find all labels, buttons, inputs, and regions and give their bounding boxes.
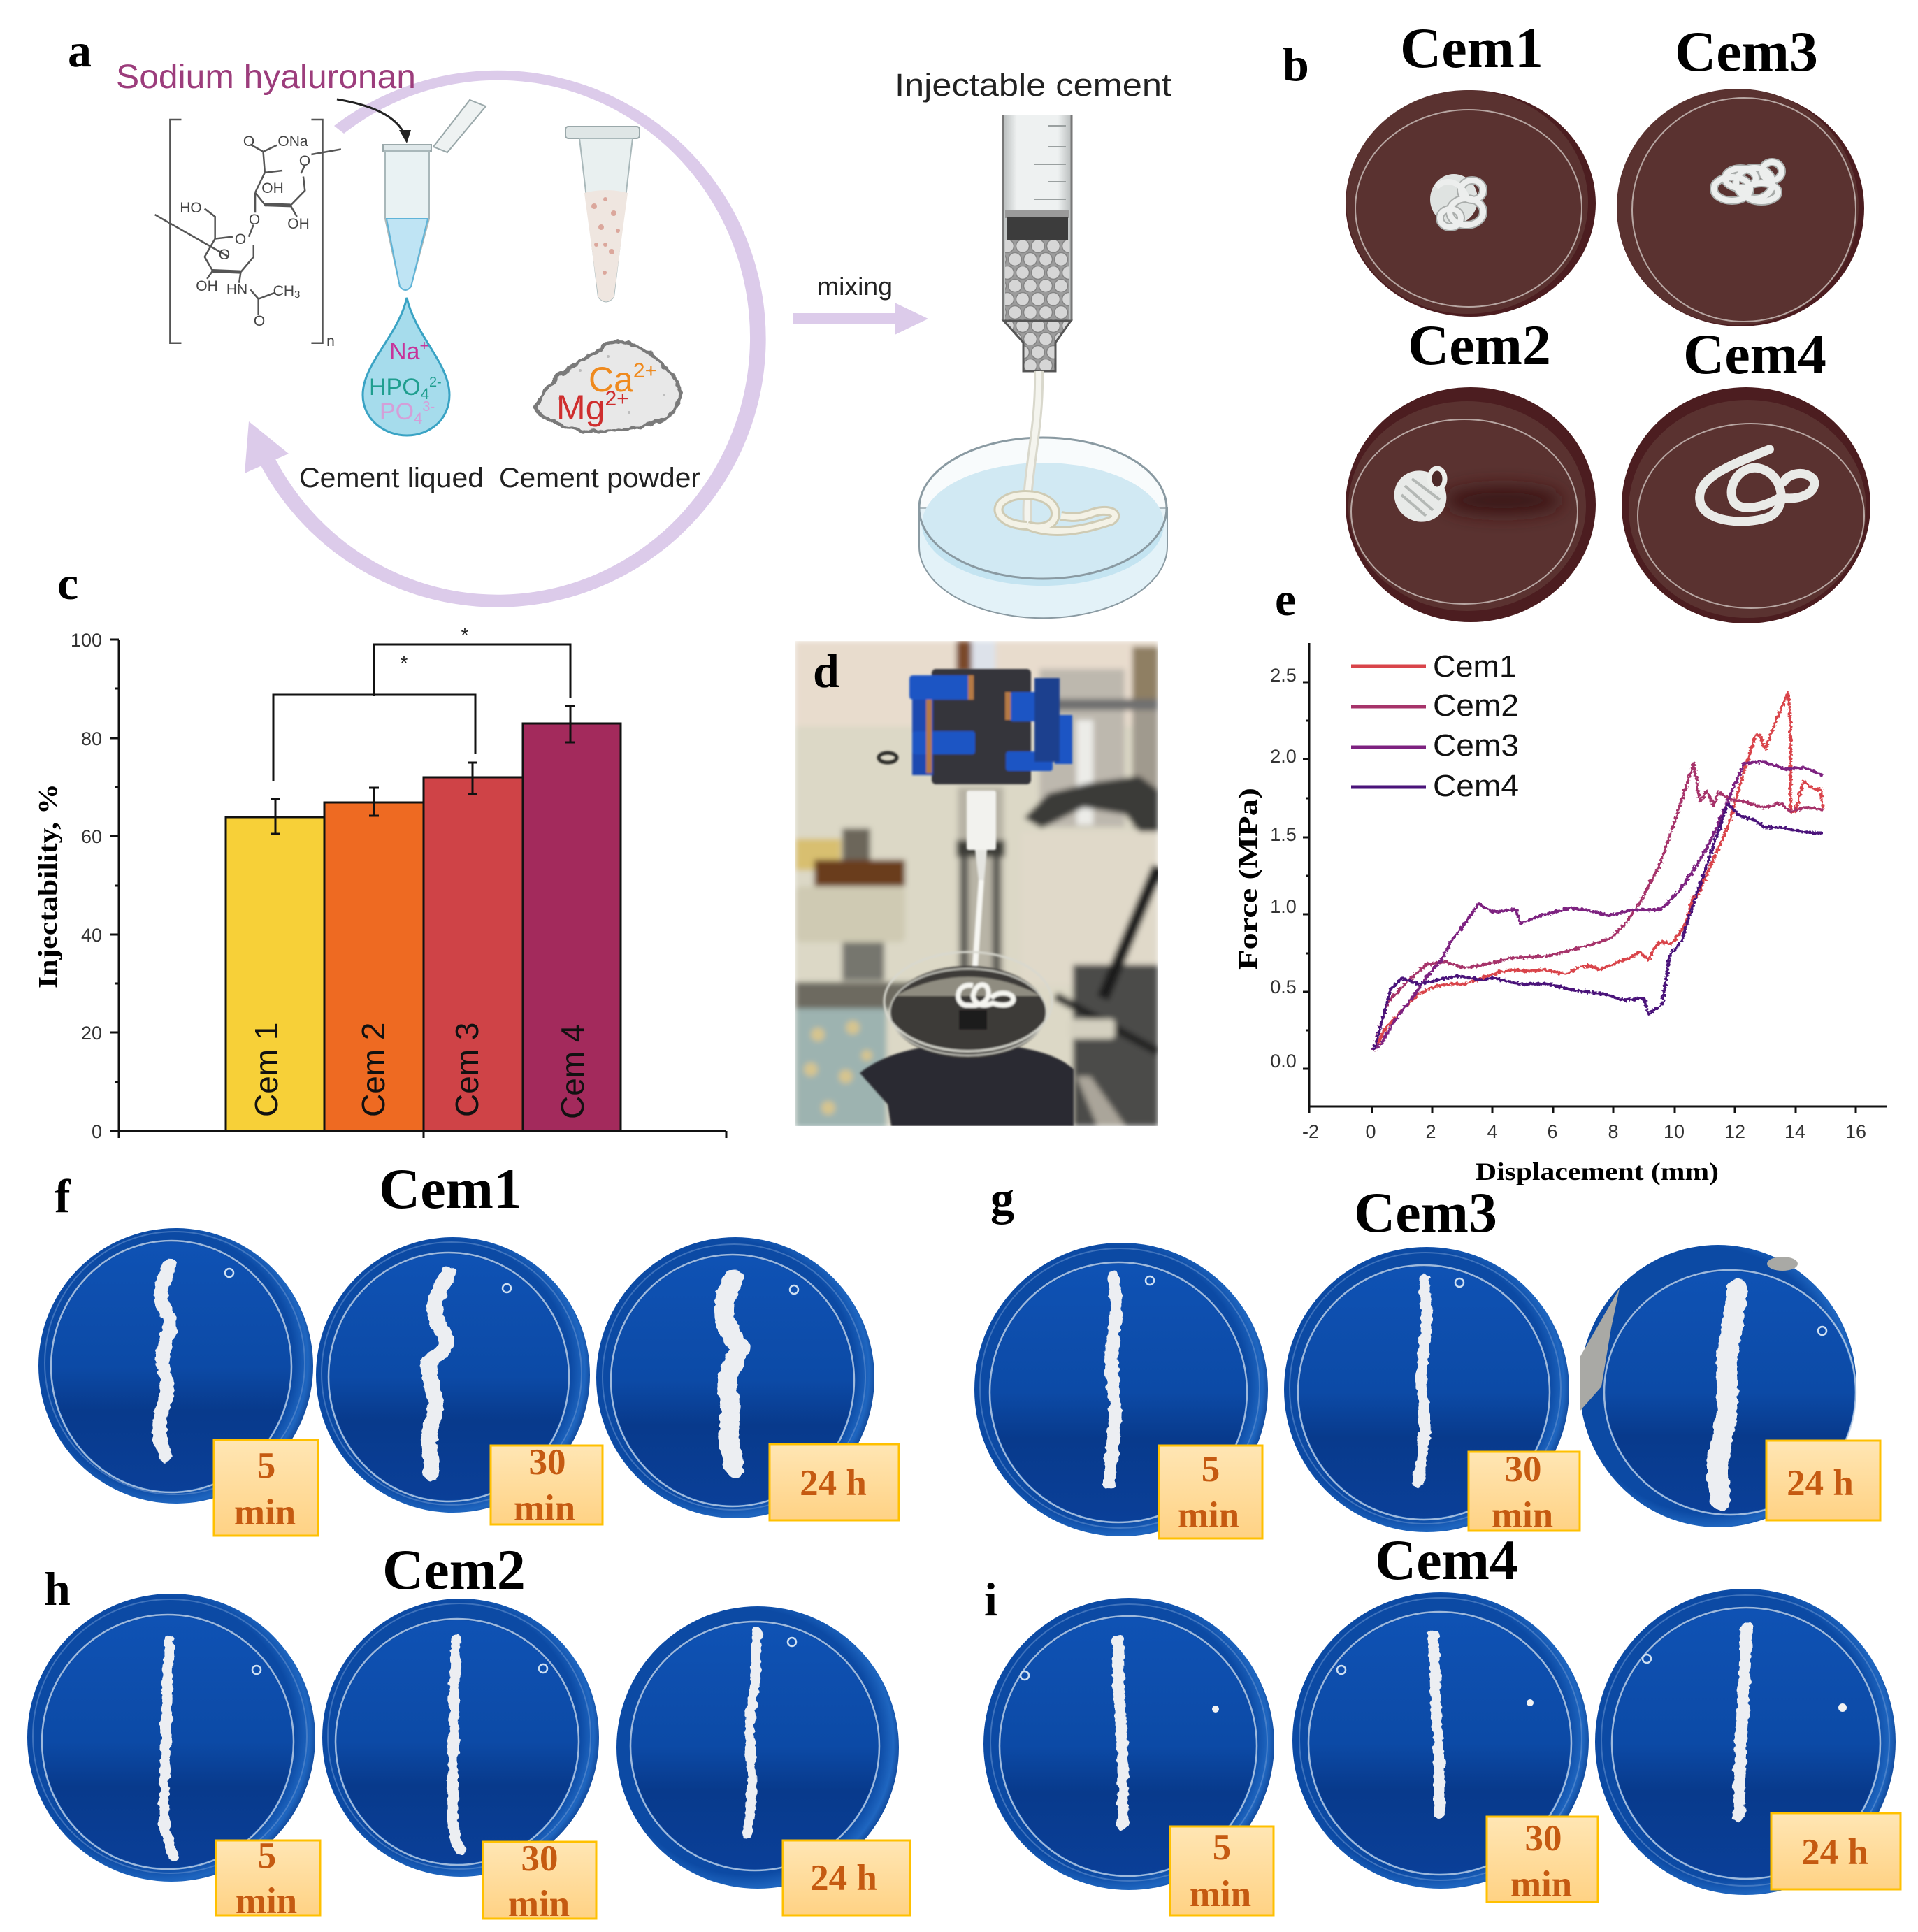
y tick labels: 0.0 (1270, 1051, 1297, 1072)
photo background and equipment (795, 641, 1158, 1127)
icon: petri dish with extruded cement (919, 371, 1167, 618)
photo: Cem2 dish (1346, 387, 1596, 622)
icon: powder pile with ions (536, 341, 681, 432)
chemical structure of hyaluronan: HN (226, 282, 247, 298)
icon: powder pile with ions: 2+ (633, 359, 657, 382)
error bars (271, 706, 575, 834)
chemical structure of hyaluronan: CH (273, 283, 294, 299)
axes and ticks (110, 640, 726, 1138)
heading Cem2: Cem2 (1408, 313, 1551, 377)
legend (1351, 649, 1519, 803)
photo: Cem4 dish (1622, 387, 1870, 623)
panel g: Cem3 washout photos (974, 1172, 1880, 1538)
chemical structure of hyaluronan (155, 120, 341, 349)
clamp (879, 669, 1072, 784)
significance brackets: * (401, 652, 408, 674)
x tick labels: 2 (1425, 1121, 1436, 1142)
x tick labels: 6 (1547, 1121, 1558, 1142)
icon: liquid drop with ions: PO (380, 398, 414, 425)
time label 30 min: 30 (521, 1838, 558, 1879)
heading Cem1: Cem1 (1400, 16, 1543, 80)
x axis title: Displacement (mm) (1476, 1158, 1719, 1185)
x tick labels: 16 (1845, 1121, 1866, 1142)
chemical structure of hyaluronan: O (219, 247, 230, 263)
y tick labels: 80 (81, 728, 102, 749)
chemical structure of hyaluronan: OH (196, 278, 218, 294)
time label 24 h (1771, 1813, 1901, 1889)
time label 24 h: 24 h (800, 1463, 867, 1504)
dish 30 min (322, 1599, 599, 1877)
icon: syringe (1003, 115, 1072, 371)
panel label f: f (55, 1169, 71, 1223)
heading: sodium hyaluronan: Sodium hyaluronan (116, 59, 416, 96)
dish 24 h (1595, 1589, 1896, 1895)
icon: liquid drop with ions (363, 298, 449, 435)
icon: powder pile with ions: 2+ (605, 387, 629, 410)
chemical structure of hyaluronan: 3 (294, 289, 300, 301)
syringe and extruded filament (967, 791, 996, 986)
icon: liquid drop with ions: 4 (414, 410, 422, 427)
panel e: force displacement chart (1234, 643, 1887, 1185)
heading Cem3: Cem3 (1675, 20, 1818, 83)
heading Cem4: Cem4 (1375, 1528, 1518, 1592)
icon: liquid tube (383, 100, 486, 290)
y tick labels: 20 (81, 1023, 102, 1044)
time label 30 min: 30 (528, 1442, 566, 1483)
time label 24 h: 24 h (810, 1858, 877, 1898)
panel label i: i (984, 1573, 997, 1626)
panel label g: g (990, 1172, 1014, 1225)
y axis title: Injectability, % (34, 784, 63, 988)
heading Cem2: Cem2 (382, 1538, 526, 1601)
heading Cem4: Cem4 (1683, 322, 1826, 386)
x tick labels: 8 (1608, 1121, 1619, 1142)
x tick labels (1302, 1121, 1866, 1142)
panel h: Cem2 washout photos (27, 1538, 910, 1924)
time label 5 min (216, 1836, 320, 1922)
icon: powder pile with ions: Ca (589, 360, 633, 399)
panel a: cement preparation schematic (68, 24, 1172, 618)
legend: Cem4 (1433, 769, 1519, 803)
time label 5 min: 5 (1202, 1449, 1220, 1490)
time label 24 h (783, 1840, 910, 1915)
y tick labels: 0.5 (1270, 976, 1297, 997)
bar labels: Cem 4 (554, 1025, 591, 1119)
icon: liquid drop with ions: 2- (429, 375, 442, 390)
chemical structure of hyaluronan: O (243, 134, 254, 150)
time label 5 min: min (236, 1881, 297, 1922)
icon: liquid drop with ions: 3- (422, 399, 435, 414)
y tick labels: 100 (71, 630, 102, 651)
bar labels: Cem 2 (355, 1023, 391, 1117)
y tick labels (71, 630, 102, 1142)
time label 5 min (214, 1440, 318, 1536)
panel label b: b (1283, 38, 1309, 91)
panel i: Cem4 washout photos (983, 1528, 1901, 1915)
panel label a: a (68, 24, 92, 77)
time label 5 min: 5 (258, 1836, 276, 1876)
time label 30 min: min (508, 1884, 570, 1924)
chemical structure of hyaluronan: O (235, 231, 246, 247)
icon: liquid drop with ions: 4 (421, 385, 429, 403)
time label 5 min: 5 (1213, 1827, 1231, 1868)
chemical structure of hyaluronan: OH (261, 180, 284, 196)
bars (226, 723, 621, 1131)
panel label e: e (1275, 572, 1296, 626)
panel b: extruded cement on brown dishes (1275, 16, 1870, 626)
dish 30 min (316, 1237, 590, 1513)
time label 24 h: 24 h (1787, 1463, 1854, 1504)
time label 30 min (1487, 1817, 1598, 1905)
panel d: photograph of injection test rig (795, 641, 1158, 1127)
y tick labels: 60 (81, 826, 102, 847)
dish 5 min (38, 1228, 313, 1504)
y tick labels: 1.5 (1270, 824, 1297, 845)
bar labels (248, 1023, 591, 1119)
time label 30 min (483, 1838, 596, 1924)
icon: curved arrow into tube (337, 99, 411, 143)
panel label c: c (57, 556, 78, 610)
chemical structure of hyaluronan: ONa (277, 134, 308, 150)
time label 30 min: min (1492, 1495, 1553, 1536)
x tick labels: 10 (1664, 1121, 1685, 1142)
x tick labels: 12 (1724, 1121, 1745, 1142)
icon: liquid drop with ions: HPO (369, 374, 421, 401)
time label 5 min (1159, 1446, 1262, 1538)
x tick labels: -2 (1302, 1121, 1319, 1142)
dish 30 min (1292, 1592, 1589, 1889)
legend: Cem3 (1433, 728, 1519, 763)
chemical structure of hyaluronan: OH (287, 216, 310, 232)
axes and ticks (1303, 643, 1887, 1113)
dish 24 h (1580, 1245, 1856, 1527)
y tick labels: 0 (92, 1121, 102, 1142)
legend: Cem2 (1433, 689, 1519, 723)
circular arrow (245, 71, 766, 607)
panel f: Cem1 washout photos (38, 1157, 899, 1536)
y axis title: Force (MPa) (1234, 788, 1263, 970)
chemical structure of hyaluronan: n (326, 333, 335, 349)
time label 5 min: 5 (257, 1446, 275, 1486)
time label 24 h (770, 1444, 899, 1520)
dish 24 h (616, 1606, 899, 1889)
time label 24 h (1766, 1441, 1880, 1520)
time label 30 min: 30 (1525, 1818, 1562, 1859)
icon: liquid drop with ions: Na (389, 338, 419, 365)
icon: powder tube (565, 127, 640, 302)
photo: Cem3 dish (1617, 89, 1864, 326)
curves (1371, 693, 1823, 1050)
significance brackets (273, 624, 570, 781)
label: cement liquid: Cement liqued (299, 463, 484, 493)
dish 5 min (983, 1598, 1274, 1890)
legend: Cem1 (1433, 649, 1517, 684)
heading Cem1: Cem1 (379, 1157, 522, 1220)
chemical structure of hyaluronan: O (299, 153, 310, 169)
photo: Cem1 dish (1346, 90, 1596, 317)
time label 5 min: min (234, 1492, 296, 1533)
time label 24 h: 24 h (1801, 1832, 1868, 1873)
panel label h: h (44, 1562, 71, 1615)
time label 5 min (1170, 1826, 1274, 1915)
time label 30 min (1469, 1449, 1580, 1536)
panel label d: d (813, 644, 839, 698)
dish 5 min (974, 1243, 1268, 1536)
glass petri dish with filament loops (884, 952, 1052, 1058)
dish 30 min (1284, 1247, 1569, 1532)
time label 5 min: min (1178, 1495, 1239, 1536)
bar labels: Cem 3 (449, 1023, 485, 1117)
time label 30 min: min (514, 1488, 575, 1529)
y tick labels (1270, 665, 1297, 1072)
chemical structure of hyaluronan: HO (180, 200, 202, 216)
label: injectable cement: Injectable cement (895, 67, 1172, 103)
y tick labels: 40 (81, 925, 102, 946)
y tick labels: 2.5 (1270, 665, 1297, 686)
time label 30 min: min (1510, 1864, 1572, 1905)
label: cement powder: Cement powder (499, 463, 700, 493)
panel c: injectability bar chart (34, 556, 726, 1142)
arrow: mixing (793, 303, 928, 335)
time label 30 min (491, 1442, 603, 1529)
x tick labels: 4 (1487, 1121, 1498, 1142)
icon: powder pile with ions: Mg (556, 388, 605, 427)
x tick labels: 14 (1784, 1121, 1805, 1142)
stage (860, 1043, 1074, 1126)
chemical structure of hyaluronan: O (254, 313, 265, 329)
significance brackets: * (461, 624, 469, 646)
bar labels: Cem 1 (248, 1023, 284, 1117)
dish 5 min (27, 1594, 315, 1882)
label: mixing: mixing (817, 272, 893, 301)
x tick labels: 0 (1365, 1121, 1376, 1142)
heading Cem3: Cem3 (1354, 1181, 1497, 1244)
icon: liquid drop with ions: + (419, 337, 428, 354)
y tick labels: 2.0 (1270, 746, 1297, 767)
y tick labels: 1.0 (1270, 896, 1297, 917)
time label 30 min: 30 (1504, 1449, 1542, 1490)
chemical structure of hyaluronan: O (249, 212, 260, 228)
time label 5 min: min (1190, 1874, 1251, 1915)
dish 24 h (596, 1237, 874, 1518)
